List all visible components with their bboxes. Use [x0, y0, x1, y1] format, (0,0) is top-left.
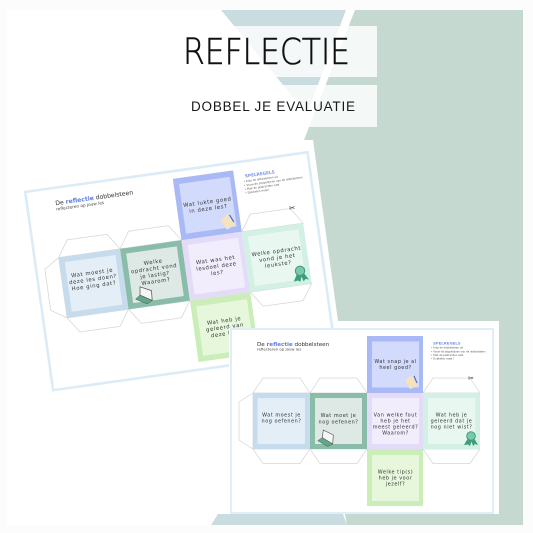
sheet 1 face: mint [242, 223, 312, 292]
sheet 1 face: blue: Wat moest je [71, 268, 113, 279]
sheet 2 face: mint: nog niet wist? [431, 424, 472, 430]
sheet 1: rotated worksheet [25, 152, 335, 390]
sheet 2 face: light green [367, 449, 423, 506]
subtitle box [200, 85, 377, 127]
sheet 1 rules: SPELREGELS [245, 169, 275, 178]
sheet 2 rules: • Plak de plakranden vast [431, 353, 463, 357]
sheet 2 rules: • Vouw de stippellijnen van de dobbelsteen [431, 349, 486, 353]
sheet 2 laptop icon [318, 430, 333, 446]
sheet 1 face: purple: lesdoel deze [196, 261, 237, 273]
sheet 1 rules: • Knip de dobbelsteen uit [243, 175, 278, 183]
blue triangle [221, 10, 346, 114]
sheet 1 face: purple [181, 232, 250, 301]
sheet 1 heading: De reflectie dobbelsteen [55, 189, 134, 207]
sheet 1 face: periwinkle: Wat lukte goed [183, 196, 232, 209]
bottom blue strip [211, 514, 347, 525]
sheet 1 face: purple: Wat was het [196, 255, 236, 266]
title: REFLECTIE [183, 32, 350, 73]
sheet 1 rules [242, 166, 304, 195]
sheet 2 scissors icon: ✂ [468, 374, 474, 382]
sheet 2 face: periwinkle: heel goed? [379, 365, 412, 371]
sheet 2 face: periwinkle: Wat snap je al [374, 359, 417, 365]
sheet 1 face: mint: vond je het [259, 253, 296, 264]
sheet 2 face: mint [423, 393, 480, 449]
sheet 1 rosette icon [292, 265, 309, 283]
sheet 2 face: mint: Wat heb je [436, 412, 467, 418]
sheet 1 tabs [41, 207, 314, 336]
sheet 2 face: dark green: nog oefenen? [319, 419, 358, 425]
sheet 2 face: light green: heb je voor [379, 476, 413, 482]
sheet 2 face: light green: jezelf? [385, 482, 405, 488]
sheet 2 face: dark green: Wat moet je [321, 413, 356, 419]
sheet 2 face: dark green [310, 393, 367, 449]
sheet 2 rules: SPELREGELS [433, 340, 461, 346]
title box [200, 26, 377, 77]
sheet 2 face: light green: Welke tip(s) [378, 470, 413, 476]
sheet 1 notebook icon [220, 213, 236, 230]
sheet 2 face: purple: heb je het [380, 418, 411, 424]
sheet 1 face: dark green: je lastig? [139, 271, 170, 281]
sheet 1 face: blue: deze les doen? [69, 274, 117, 286]
sheet 2 heading: De reflectie dobbelsteen [257, 342, 330, 348]
sheet 2 rules: • Knip de dobbelsteen uit [431, 345, 463, 349]
sheet 2 face: blue: nog oefenen? [262, 418, 301, 424]
sheet 2 rules: • Dobbelen maar! [431, 357, 454, 361]
sheet 1 face: blue: Hoe ging dat? [71, 280, 117, 292]
subtitle: DOBBEL JE EVALUATIE [191, 99, 355, 114]
sheet 2: front worksheet [231, 329, 493, 513]
sheet 1 heading: reflecteren op jouw les [56, 200, 104, 212]
sheet 1 face: mint: Welke opdracht [251, 246, 302, 258]
sheet 1 rules: • Dobbelen maar! [245, 188, 270, 195]
sheet 1 face: dark green: Waarom? [141, 277, 171, 287]
sheet 2 heading [257, 342, 330, 352]
sheet 2 face: mint: geleerd dat je [431, 418, 472, 424]
sheet 2 rosette icon [464, 432, 478, 446]
sheet 2 face: purple: Van welke fout [374, 412, 417, 418]
sheet 1 face: light green [190, 292, 259, 362]
sheet 2 tabs [239, 378, 480, 464]
sheet 1 face: light green: geleerd van [206, 322, 244, 333]
sheet 1 face: periwinkle: in deze les? [189, 204, 228, 215]
sheet 1 face: light green: Wat heb je [207, 316, 242, 327]
sheet 2 face: periwinkle [367, 336, 423, 393]
sheet 2 heading: reflecteren op jouw les [257, 347, 301, 352]
sheet 1 scissors icon: ✂ [288, 203, 296, 213]
sheet 2 face: purple [367, 393, 423, 449]
sheet 1 face: light green: deze les? [211, 329, 241, 339]
sheet 1 face: dark green [120, 240, 190, 309]
sheet 2 face: blue [253, 393, 310, 449]
sheet 1 face: dark green: opdracht vond [131, 263, 178, 275]
sheet 2 face: purple: meest geleerd? [373, 424, 418, 430]
sheet 2 white backing [229, 321, 499, 514]
sheet 1 laptop icon [134, 285, 153, 305]
sheet 1 face: dark green: Welke [144, 258, 163, 267]
sheet 1 rules: • Vouw de stippellijnen van de dobbelsteen [244, 175, 303, 187]
sheet 1 face: periwinkle [173, 170, 242, 240]
sheet 1 face: mint: leukste? [265, 260, 292, 270]
green panel [304, 10, 523, 525]
sheet 1 rules: • Plak de plakranden vast [244, 182, 280, 191]
sheet 2 rules [431, 340, 486, 361]
sheet 2 face: purple: Waarom? [382, 430, 409, 436]
sheet 1 face: blue [59, 249, 129, 318]
sheet 2 face: blue: Wat moest je [262, 412, 301, 418]
sheet 2 notebook icon [405, 375, 418, 389]
sheet 1 face: purple: les? [211, 270, 224, 277]
